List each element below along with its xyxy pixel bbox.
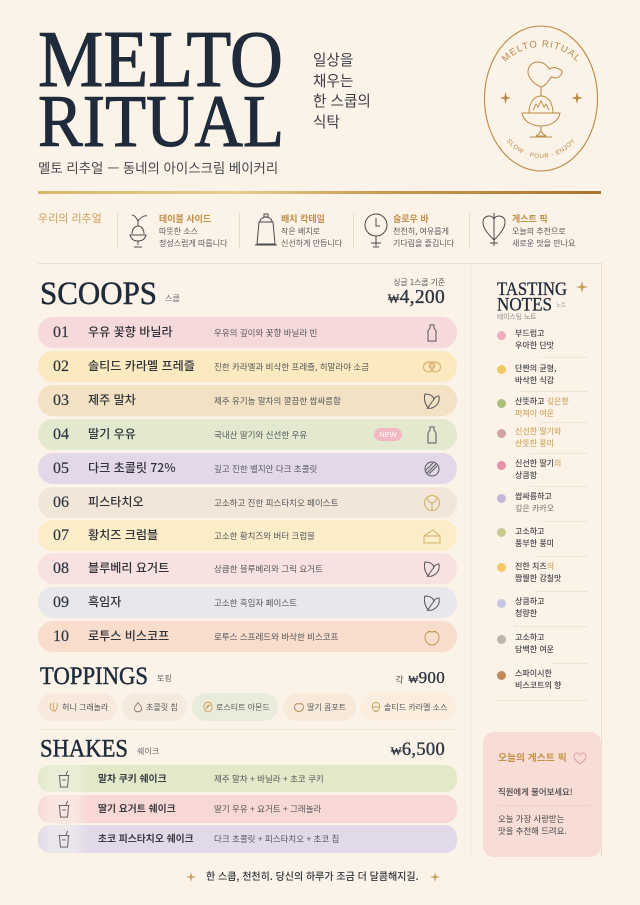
scoop row 05: 다크 초콜릿 72% — [88, 459, 176, 476]
ritual: guest pick: 게스트 픽 — [512, 212, 548, 225]
text: 쌉싸름하고 깊은 카카오 — [515, 491, 554, 514]
card question: 직원에게 물어보세요! — [498, 786, 573, 798]
toppings korean label: 토핑 — [157, 673, 172, 684]
scoop row 07 — [38, 520, 457, 551]
shakes korean label: 쉐이크 — [137, 746, 159, 757]
scoop row 07: 07 — [53, 527, 69, 544]
note 2 — [497, 365, 506, 374]
scoop row 04 — [38, 419, 457, 450]
shake row: strawberry yogurt — [38, 795, 457, 823]
scoop row 04: 딸기 우유 — [88, 425, 136, 442]
scoop row 06: 06 — [53, 494, 69, 511]
text: 고소하고 풍부한 풍미 — [515, 526, 554, 548]
scoop row 05: 깊고 진한 벨지안 다크 초콜릿 — [214, 463, 317, 475]
scoop row 03: 제주 말차 — [88, 391, 136, 408]
tagline: 일상을 채우는 한 스쿱의 식탁 — [313, 49, 371, 132]
logo badge — [484, 26, 598, 172]
card title: 오늘의 게스트 픽 — [498, 750, 567, 764]
scoop row 05 — [38, 453, 457, 484]
panel: guest pick card — [483, 732, 601, 857]
scoop row 09: 고소한 흑임자 페이스트 — [214, 597, 297, 609]
scoop row 01: 우유 꽃향 바닐라 — [88, 323, 173, 340]
icon: shaker — [255, 214, 277, 246]
scoop row 01: 우유의 깊이와 꽃향 바닐라 빈 — [214, 327, 317, 339]
scoop row 08: 상큼한 블루베리와 그릭 요거트 — [214, 563, 323, 575]
shake row: matcha cookie — [38, 765, 457, 792]
text: 상큼하고 청량한 — [515, 596, 544, 618]
scoop row 06 — [38, 487, 457, 518]
scoop row 02: 진한 카라멜과 비삭한 프레즐, 히말라야 소금 — [214, 361, 369, 373]
scoop row 07: 황치즈 크럼블 — [88, 526, 158, 543]
scoop row 08: 블루베리 요거트 — [88, 559, 169, 576]
footer line: 한 스쿱, 천천히. 당신의 하루가 조금 더 달콤해지길. — [206, 868, 419, 883]
note 9 — [497, 599, 506, 608]
scoop row 05: 05 — [53, 460, 69, 477]
topping: strawberry compote — [283, 693, 356, 721]
topping: roasted almond: 로스티트 아몬드 — [216, 702, 270, 712]
scoop row 06: 피스타치오 — [88, 493, 144, 510]
scoops korean label: 스쿱 — [165, 293, 180, 304]
shake row: strawberry yogurt: 딸기 요거트 쉐이크 — [98, 801, 176, 815]
shake row: choco pistachio: 다크 초콜릿 + 피스타치오 + 초코 칩 — [214, 832, 339, 844]
shake row: strawberry yogurt: 딸기 우유 + 요거트 + 그래놀라 — [214, 802, 321, 814]
dividers — [117, 213, 118, 249]
shake row: choco pistachio — [38, 825, 457, 853]
scoop row 04: 국내산 딸기와 신선한 우유 — [214, 429, 307, 441]
ritual: slow bar: 슬로우 바 — [393, 212, 429, 225]
topping: strawberry compote: 딸기 콤포트 — [307, 702, 346, 712]
topping: honey granola: 허니 그래놀라 — [62, 702, 108, 712]
icon: heart — [574, 752, 586, 764]
note 4 — [497, 429, 506, 438]
topping: chocolate chip: 초콜릿 칩 — [146, 702, 178, 712]
scoop row 08 — [38, 553, 457, 584]
icon: footer stars — [186, 872, 440, 882]
tasting notes subtitle: 테이스팅 노트 — [497, 311, 536, 321]
shake row: choco pistachio: 초코 피스타치오 쉐이크 — [98, 831, 194, 845]
text: 작은 배치로 신선하게 만듭니다 — [281, 226, 342, 249]
text: 진한 치즈의 짭짤한 감칠맛 — [515, 561, 561, 584]
note 10 — [497, 635, 506, 644]
icon: table side sundae — [129, 214, 148, 248]
toppings price: 각 ₩900 — [395, 668, 445, 687]
text: 신선한 딸기의 상큼함 — [515, 458, 561, 480]
topping: chocolate chip — [122, 693, 187, 721]
scoop row 09: 09 — [53, 594, 69, 611]
text: 부드럽고 우아한 단맛 — [515, 328, 554, 350]
new badge — [374, 428, 402, 441]
scoop row 02: 02 — [53, 358, 69, 375]
tasting notes heading — [497, 279, 567, 314]
new badge: NEW — [379, 430, 397, 439]
scoop row 01 — [38, 317, 457, 348]
title — [38, 20, 284, 155]
divider above menu — [38, 263, 601, 264]
topping: salted caramel sauce — [360, 693, 457, 721]
text: 따뜻한 소스 정성스럽게 따릅니다 — [159, 226, 227, 249]
scoop row 10: 10 — [53, 628, 69, 645]
scoop row 06: 고소하고 진한 피스타치오 페이스트 — [214, 497, 338, 509]
scoop row 03: 제주 유기농 말차의 깔끔한 쌉싸름함 — [214, 395, 341, 407]
gold rule — [38, 191, 601, 194]
text: 고소하고 담백한 여운 — [515, 632, 554, 654]
ritual heading: 우리의 리추얼 — [38, 210, 102, 226]
topping: roasted almond — [192, 693, 278, 721]
scoop row 03 — [38, 385, 457, 416]
icon: sparkle — [576, 281, 588, 293]
scoops price note: 싱글 1스쿱 기준 — [393, 277, 445, 288]
scoop row 02: 솔티드 카라멜 프레즐 — [88, 357, 195, 374]
scoop row 08: 08 — [53, 560, 69, 577]
scoop row 10: 로투스 스프레드와 바삭한 비스코프 — [214, 631, 338, 643]
ritual: batch cocktail: 배치 칵테일 — [281, 212, 325, 225]
scoop row 09: 흑임자 — [88, 593, 121, 610]
topping: salted caramel sauce: 솔티드 카라멜 소스 — [384, 702, 447, 712]
text: 스파이시한 비스코트의 향 — [515, 668, 561, 690]
logo badge: MELTO RITUAL — [502, 40, 579, 62]
scoop row 01: 01 — [53, 324, 69, 341]
card body: 오늘 가장 사랑받는 맛을 추천해 드려요. — [498, 813, 567, 837]
subtitle: 멜토 리추얼 — 동네의 아이스크림 베이커리 — [38, 157, 278, 177]
scoop row 10: 로투스 비스코프 — [88, 627, 169, 644]
text: 신선한 딸기와 산뜻한 풍미 — [515, 426, 561, 448]
dotted divider — [38, 729, 457, 730]
scoop row 03: 03 — [53, 392, 69, 409]
shake row: matcha cookie: 제주 말차 + 바닐라 + 초코 쿠키 — [214, 772, 324, 784]
text: 단짠의 균형, 바삭한 식감 — [515, 363, 556, 386]
scoops price: ₩4,200 — [388, 287, 445, 308]
panel outline: tasting notes column — [470, 263, 602, 857]
card divider — [498, 805, 590, 806]
logo badge: SLOW · POUR · ENJOY — [507, 138, 574, 158]
tasting notes tiny label: 노트 — [556, 301, 566, 309]
text: 천천히, 여유롭게 기다림을 즐깁니다 — [393, 226, 454, 249]
icon: clock — [364, 214, 388, 248]
scoop row 02 — [38, 351, 457, 382]
scoop row 09 — [38, 587, 457, 618]
scoop row 07: 고소한 황치즈와 버터 크럼블 — [214, 530, 315, 542]
note 5 — [497, 461, 506, 470]
topping: honey granola — [38, 693, 117, 721]
text: 산뜻하고 깊은향 퍼져이 여운 — [515, 396, 569, 418]
note 3 — [497, 399, 506, 408]
note 1 — [497, 331, 506, 340]
note 6 — [497, 494, 506, 503]
note 11 — [497, 671, 506, 680]
text: 오늘의 추천으로 새로운 맛을 만나요 — [512, 226, 575, 249]
note 7 — [497, 528, 506, 537]
scoop row 04: 04 — [53, 426, 69, 443]
ritual: table side: 테이블 사이드 — [159, 212, 211, 225]
shake row: matcha cookie: 말차 쿠키 쉐이크 — [98, 771, 167, 785]
icon: heart pick — [482, 213, 506, 246]
shakes price: ₩6,500 — [391, 740, 445, 760]
note 8 — [497, 563, 506, 572]
scoop row 10 — [38, 621, 457, 652]
